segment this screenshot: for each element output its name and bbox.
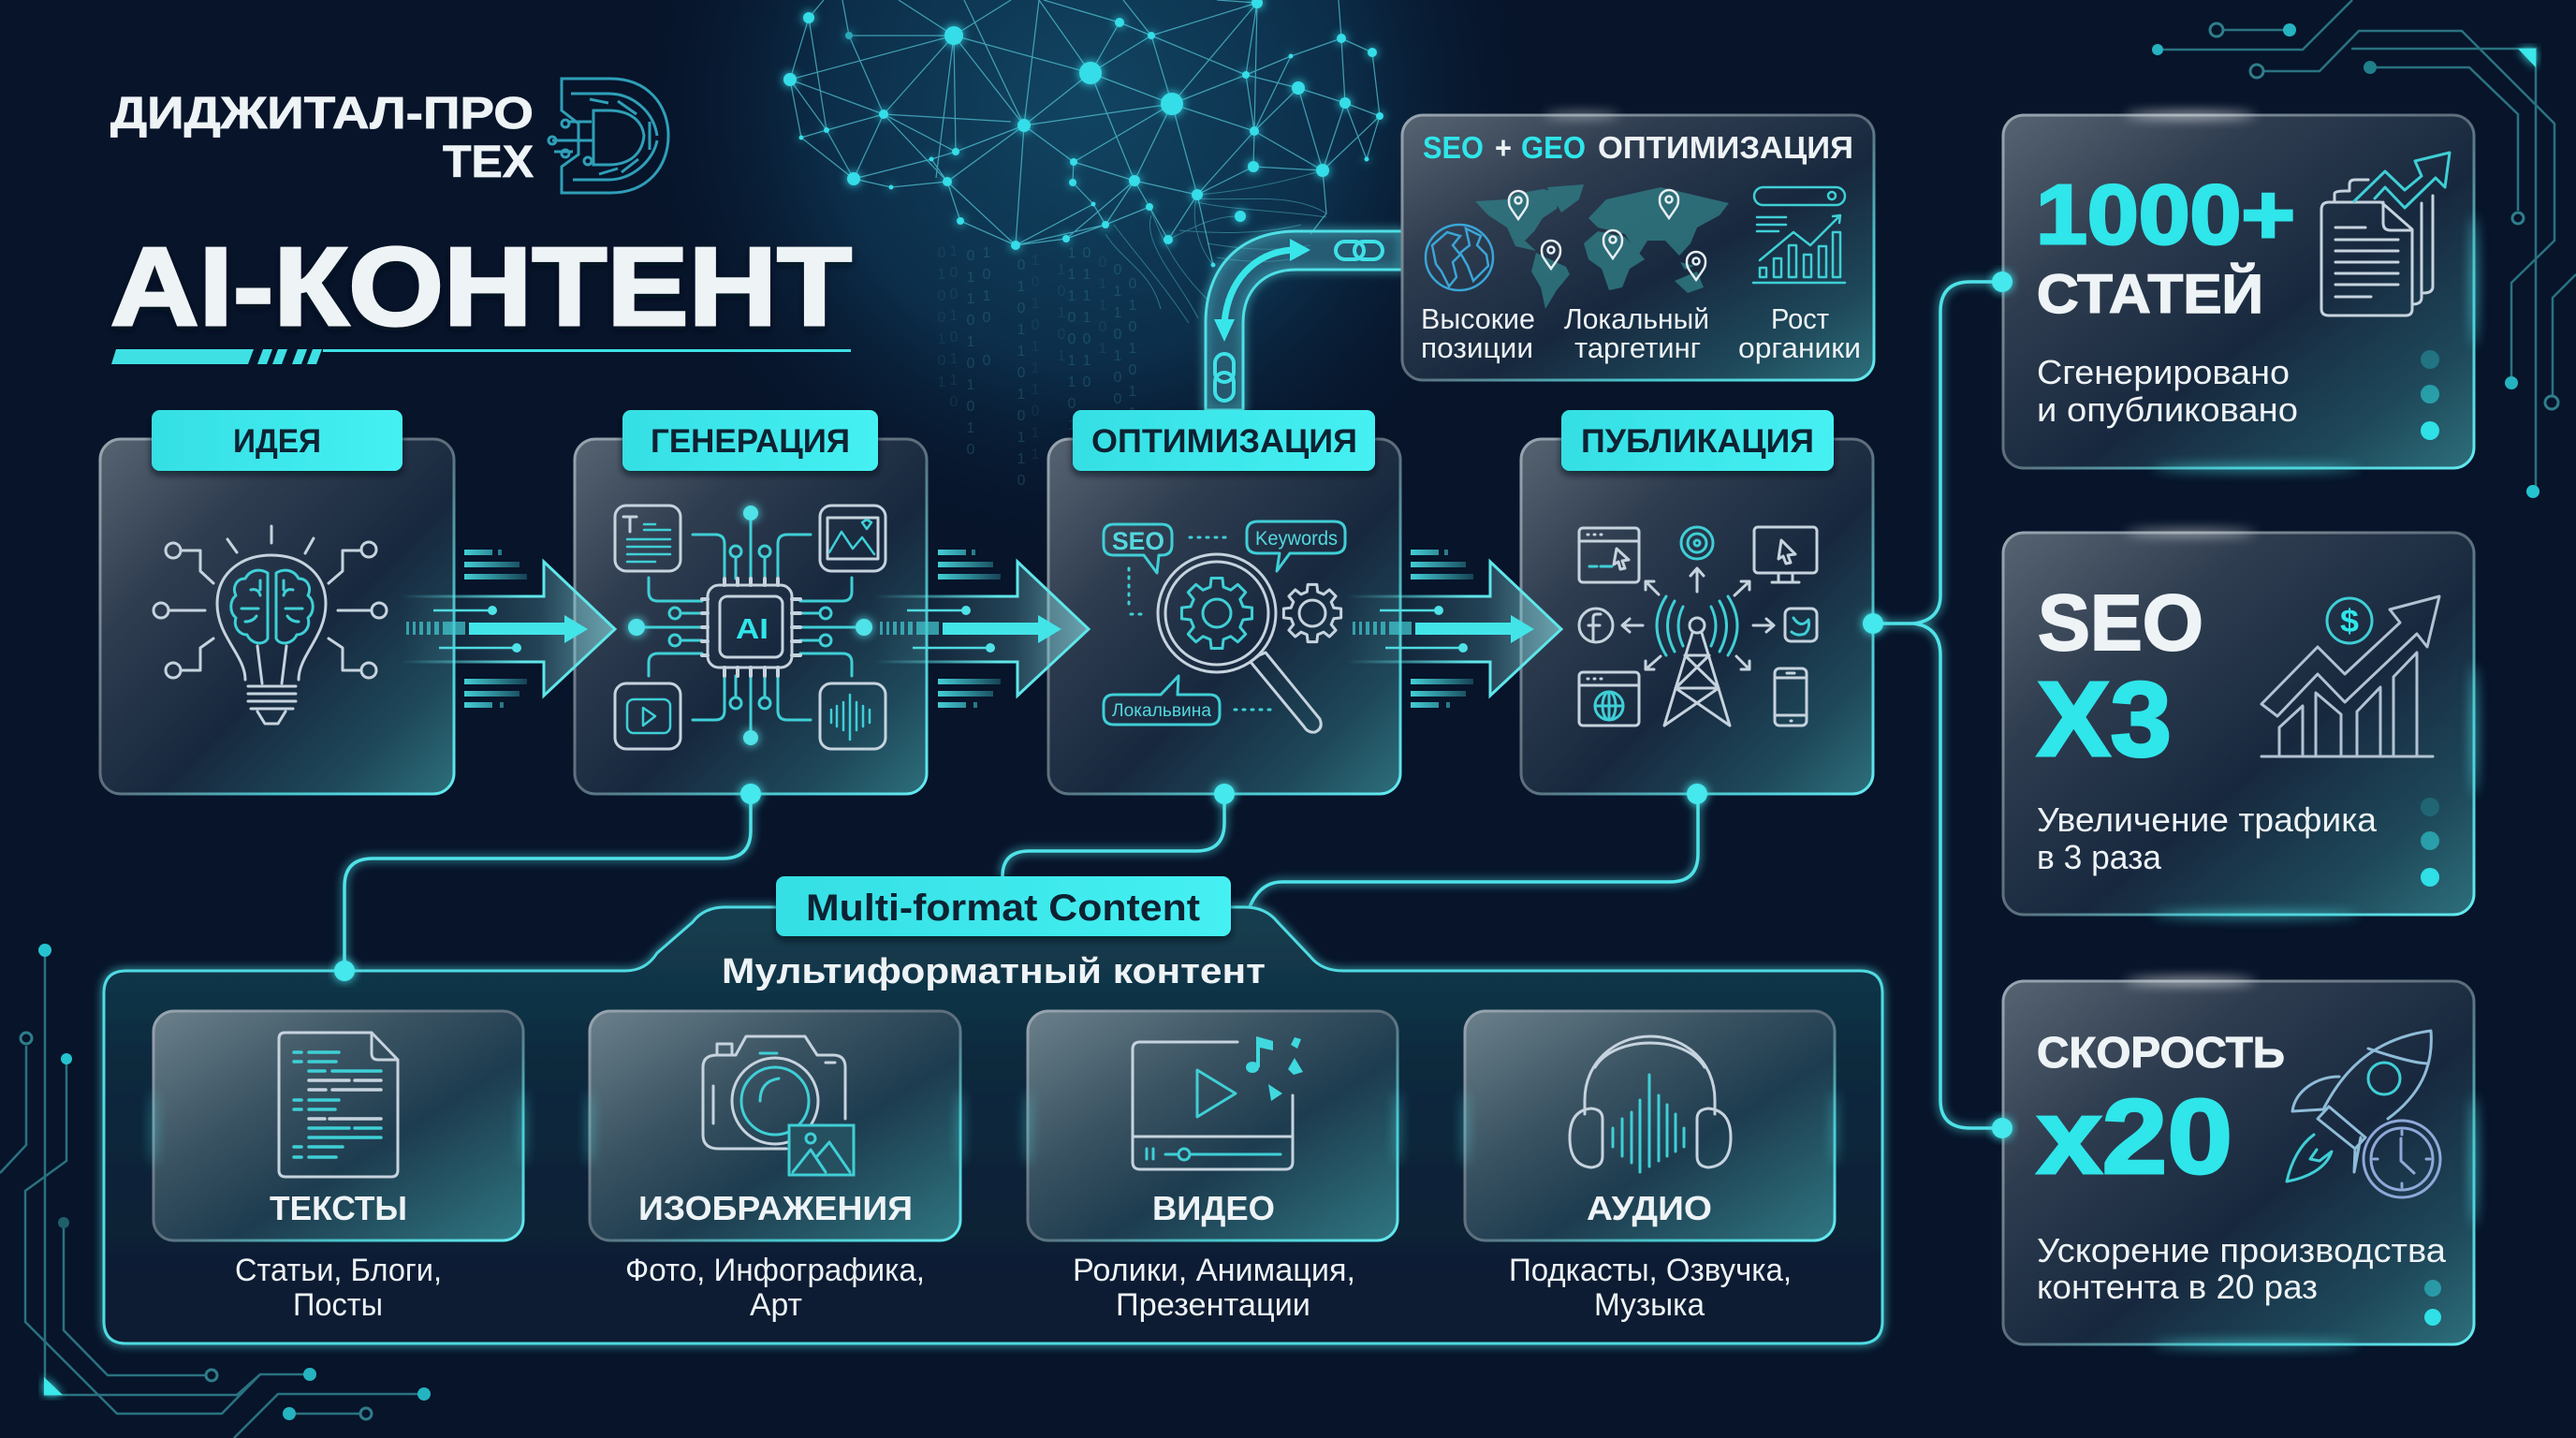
neural network brain (783, 0, 1383, 323)
connector nodes on step cards (740, 613, 1883, 804)
card light streaks (152, 112, 2477, 1347)
tab: idea: ИДЕЯ (233, 423, 321, 460)
icon: rocket with clock (2287, 1031, 2440, 1197)
node on 1000+ card (1992, 271, 2012, 292)
tab: multi-format content (776, 876, 1231, 936)
stat card: 1000+ articles (2003, 115, 2474, 468)
tab: generation (622, 410, 878, 471)
falling binary code: 0111010 (1078, 245, 1095, 396)
SEO GEO heading (1423, 130, 1853, 165)
tab: optimization (1073, 410, 1375, 471)
falling binary code: 10010110 (945, 243, 962, 416)
arrow: optimization to publication (1347, 550, 1561, 708)
SEO GEO labels: позиции (1421, 331, 1533, 364)
connector wires: publication to results (1873, 282, 2002, 1128)
SEO GEO heading: ОПТИМИЗАЦИЯ (1598, 130, 1853, 165)
logo D icon (549, 79, 668, 193)
SEO GEO labels: Локальный (1564, 302, 1709, 335)
sub-card descriptions: Подкасты, Озвучка, (1509, 1253, 1792, 1288)
falling binary code: 11100110101 (1063, 245, 1080, 482)
icon: light bulb with brain (154, 526, 387, 724)
sub-card: video (1028, 1011, 1398, 1240)
tab: publication: ПУБЛИКАЦИЯ (1581, 423, 1814, 460)
stat card: speed x20: Ускорение производства (2037, 1231, 2447, 1269)
falling binary code: 1010111011 (1028, 253, 1043, 468)
connector wires: cards to multi-format panel (344, 794, 1698, 971)
sub-card: video: ВИДЕО (1152, 1189, 1275, 1227)
node on speed card (1992, 1118, 2012, 1138)
icon: magnifier with gears and bubbles: SEO (1112, 527, 1164, 555)
panel: step 4 publication (1521, 439, 1873, 794)
panel: step 1 idea (100, 439, 454, 794)
falling binary code: 01101001001 (1110, 262, 1125, 499)
sub-card descriptions (235, 1253, 1792, 1323)
falling binary code: 0110101010 (962, 248, 979, 463)
circuit decoration: top right (2152, 0, 2576, 498)
icon: text document (279, 1033, 398, 1177)
icon: AI chip with media (615, 506, 886, 749)
SEO GEO labels: органики (1738, 331, 1861, 364)
icon: magnifier with gears and bubbles: Keywords (1255, 528, 1338, 550)
falling binary code: 0101011 (1125, 276, 1140, 427)
stat card: 1000+ articles: 1000+ (2036, 169, 2295, 262)
icon: magnifier with gears and bubbles (1104, 521, 1345, 732)
falling binary code: 10101 (1054, 262, 1069, 370)
sub-card: images: ИЗОБРАЖЕНИЯ (638, 1189, 913, 1227)
stat card: SEO X3: SEO (2038, 579, 2203, 667)
stat card: speed x20: контента в 20 раз (2037, 1268, 2318, 1306)
node on multi-format panel (334, 961, 355, 981)
sub-card: images (590, 1011, 960, 1240)
sub-card descriptions: Ролики, Анимация, (1073, 1253, 1355, 1288)
title underline (111, 349, 851, 364)
stat card: 1000+ articles: и опубликовано (2037, 390, 2298, 429)
brain background glow (618, 0, 1554, 580)
stat card: speed x20: СКОРОСТЬ (2037, 1028, 2285, 1077)
panel: multi-format content (104, 907, 1882, 1343)
title: AI-КОНТЕНТ (110, 225, 852, 349)
icon: search and growth chart (1753, 187, 1845, 283)
icon: document stack with growth arrow (2321, 153, 2450, 315)
tab: idea (152, 410, 402, 471)
stat card: speed x20: x20 (2037, 1078, 2232, 1196)
progress dots (2424, 1280, 2441, 1326)
stat card: 1000+ articles: СТАТЕЙ (2037, 264, 2263, 325)
progress dots (2421, 798, 2439, 887)
sub-card descriptions: Фото, Инфографика, (625, 1253, 925, 1288)
stat card: SEO X3: Увеличение трафика (2037, 800, 2378, 839)
tab: publication (1561, 410, 1834, 471)
circuit decoration: bottom left (0, 944, 431, 1438)
SEO GEO heading: + (1495, 130, 1512, 165)
panel heading: Мультиформатный контент (722, 952, 1266, 991)
sub-card descriptions: Статьи, Блоги, (235, 1253, 442, 1288)
panel: step 3 optimization (1048, 439, 1400, 794)
icon: globe (1426, 225, 1493, 290)
world map with pins (1475, 184, 1729, 309)
pipe: optimization to SEO card (1206, 231, 1402, 410)
icon: broadcast tower with channels (1579, 527, 1817, 726)
SEO GEO labels: таргетинг (1574, 331, 1701, 364)
sub-card descriptions: Арт (750, 1287, 802, 1323)
icon: growth chart with dollar (2261, 596, 2439, 756)
stat card: SEO X3: X3 (2037, 660, 2172, 778)
panel: step 2 generation (575, 439, 927, 794)
sub-card descriptions: Посты (293, 1287, 383, 1323)
falling binary code: 1010 0 (979, 245, 994, 374)
falling binary code: 0100101 (934, 245, 949, 396)
sub-card descriptions: Музыка (1594, 1287, 1705, 1323)
tab: multi-format content: Multi-format Content (806, 888, 1200, 929)
pipe curved double arrow (1214, 239, 1310, 342)
stat card: SEO X3: в 3 раза (2037, 838, 2162, 876)
sub-card: audio (1465, 1011, 1835, 1240)
falling binary code: 01101 (1095, 255, 1110, 362)
stat card: speed x20 (2003, 981, 2474, 1344)
falling binary code (934, 243, 1140, 499)
arrow: idea to generation (401, 550, 615, 708)
logo text: ДИДЖИТАЛ-ПРО (110, 89, 534, 139)
stat card: 1000+ articles: Сгенерировано (2037, 353, 2290, 391)
SEO GEO heading: SEO (1423, 130, 1484, 165)
sub-card descriptions: Презентации (1116, 1287, 1310, 1323)
SEO GEO labels: Рост (1771, 302, 1829, 335)
panel: SEO + GEO optimization (1402, 115, 1874, 380)
falling binary code: 01011010110 (1013, 257, 1030, 494)
icon: camera with photo (703, 1036, 854, 1175)
sub-card: texts: ТЕКСТЫ (270, 1189, 407, 1227)
tab: generation: ГЕНЕРАЦИЯ (651, 423, 850, 460)
SEO GEO labels: Высокие (1421, 302, 1535, 335)
pipe chain icon: horizontal (1336, 242, 1383, 259)
logo text (110, 89, 534, 187)
SEO GEO labels (1421, 302, 1861, 364)
stat card: SEO X3 (2003, 533, 2474, 915)
sub-card: texts (154, 1011, 523, 1240)
pipe chain icon: vertical (1215, 354, 1234, 401)
icon: headphones with waveform (1570, 1036, 1731, 1172)
icon: AI chip with media: AI (736, 612, 768, 645)
SEO GEO heading: GEO (1521, 130, 1586, 165)
icon: growth chart with dollar: $ (2340, 604, 2359, 639)
tab: optimization: ОПТИМИЗАЦИЯ (1091, 423, 1357, 460)
progress dots (2421, 350, 2439, 440)
logo text: ТЕХ (443, 138, 534, 187)
icon: video player with notes (1133, 1036, 1303, 1169)
icon: magnifier with gears and bubbles: Локальвина (1112, 701, 1211, 721)
arrow: generation to optimization (874, 550, 1089, 708)
logo (110, 79, 668, 193)
sub-card: audio: АУДИО (1587, 1189, 1712, 1227)
